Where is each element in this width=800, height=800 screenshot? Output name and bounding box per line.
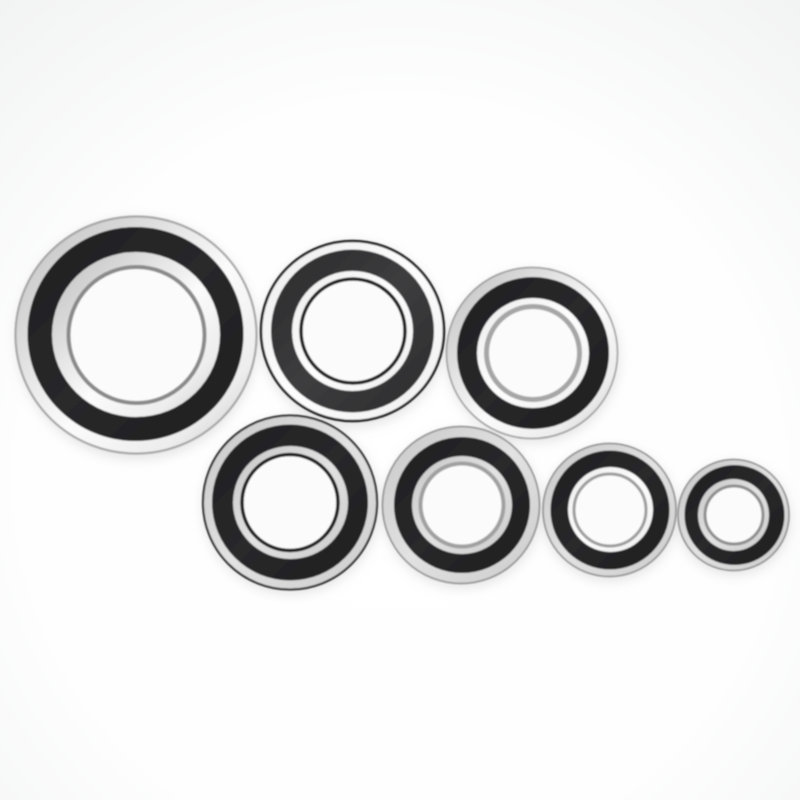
bearing 1: largest, left	[16, 216, 256, 454]
black seal	[271, 250, 434, 412]
bearing 6: bottom row, third	[543, 444, 676, 576]
outer steel ring	[446, 268, 618, 438]
bearing 4: bottom row, first	[203, 416, 377, 590]
bore	[242, 454, 338, 550]
inner steel ring	[233, 446, 348, 559]
bore	[420, 464, 504, 546]
outer steel ring	[203, 416, 377, 590]
black seal	[212, 424, 368, 580]
black seal	[550, 450, 670, 570]
bearing 3: top right	[446, 268, 618, 438]
bearing 7: smallest, right	[678, 460, 789, 570]
bearings group	[16, 216, 789, 590]
bore	[574, 474, 646, 546]
black seal	[684, 465, 784, 565]
inner steel ring	[698, 479, 769, 551]
outer steel ring	[16, 216, 256, 454]
outer steel ring	[382, 426, 540, 584]
bearing 5: bottom row, second	[382, 426, 540, 584]
bearing 2: top centre	[261, 241, 444, 421]
inner steel ring	[292, 271, 413, 391]
bore with chamfer	[68, 267, 204, 403]
bore	[301, 279, 405, 383]
outer steel ring	[261, 241, 444, 421]
inner steel ring	[52, 252, 220, 417]
bore	[486, 306, 580, 400]
outer steel ring	[543, 444, 676, 576]
black seal	[457, 277, 609, 429]
bore	[705, 486, 763, 544]
black seal	[394, 437, 530, 573]
black seal	[28, 227, 244, 441]
outer steel ring	[678, 460, 789, 570]
inner steel ring	[412, 456, 512, 554]
inner steel ring	[568, 467, 653, 552]
contact shadows	[17, 219, 790, 594]
inner steel ring	[477, 298, 589, 408]
